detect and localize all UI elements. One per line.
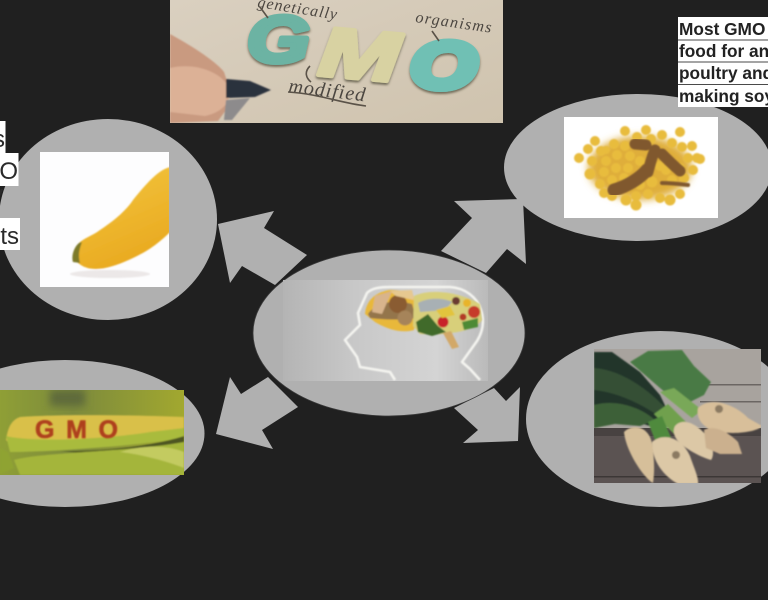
label line: ts: ts (0, 223, 19, 250)
letter O: O (410, 29, 477, 103)
panel: sugar beets (526, 331, 768, 507)
icon: head outline (345, 287, 483, 380)
image: yellow squash (40, 152, 170, 287)
text block: soybean description (678, 17, 768, 107)
text block: soybean description: food for an (679, 41, 768, 61)
panel: central brain of food (253, 250, 525, 416)
arrow: down-left to corn (216, 377, 298, 449)
image: head silhouette with food brain (283, 280, 488, 381)
image: corn cob marked GMO (0, 390, 184, 475)
arrow: up-right to soybeans (441, 199, 526, 273)
arrow: down-right to sugar beets (454, 387, 520, 443)
text: organisms: organisms (414, 9, 494, 37)
text: GMO on cob: GMO (35, 416, 118, 444)
letter G: G (247, 2, 310, 76)
panel: GMO title photo (170, 0, 503, 123)
image: sugar beets on wood table (594, 349, 762, 484)
icon: assorted food in brain (365, 290, 482, 349)
text: modified: modified (287, 75, 367, 106)
panel: soybeans (504, 94, 768, 241)
icon: hand holding pen (170, 34, 271, 123)
image: soybeans and pods (564, 117, 718, 218)
letter M: M (316, 12, 405, 97)
text block: soybean description: Most GMO (679, 19, 765, 39)
text block: left label fragments (0, 121, 20, 250)
panel: squash (0, 119, 217, 320)
panel: corn (0, 360, 204, 507)
arrow: up-left to squash (218, 211, 307, 285)
